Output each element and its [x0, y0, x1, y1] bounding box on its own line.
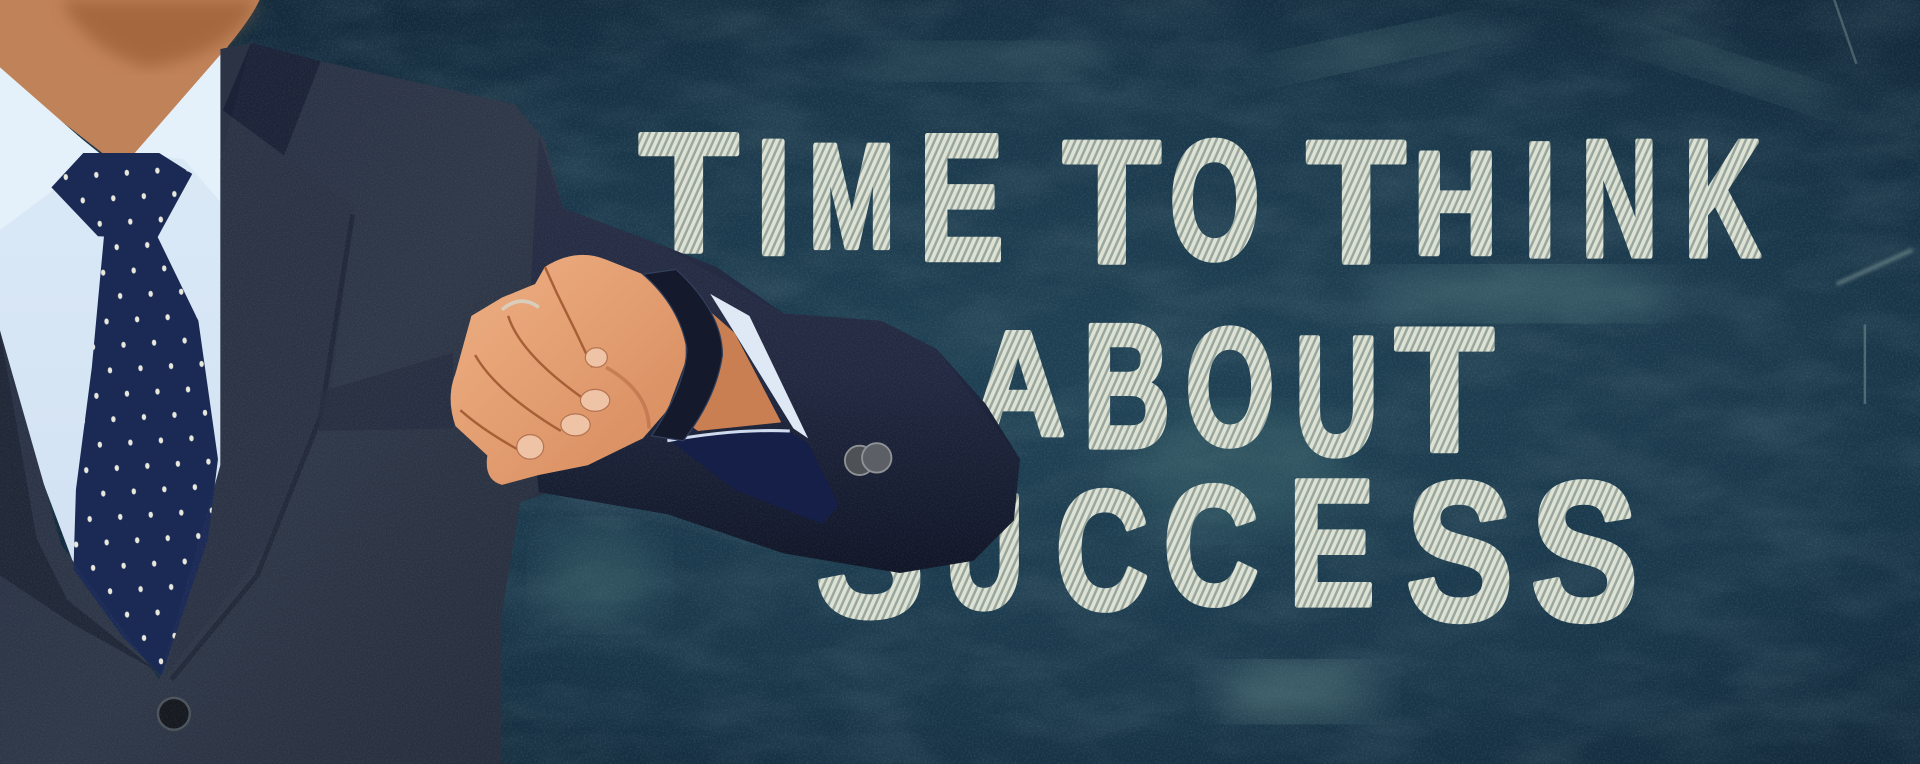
icon: finger nails [517, 348, 610, 459]
chalk heading: time to think about success [639, 98, 1761, 662]
line 3: SUCCESS: C [1056, 456, 1149, 645]
line 1: TIME TO THINK: M [808, 114, 895, 279]
man: jacket button [158, 698, 190, 730]
line 2: ABOUT [971, 288, 1494, 490]
man: chin shadow [61, 0, 257, 67]
line 1: TIME TO THINK [639, 98, 1761, 299]
line 2: ABOUT: U [1294, 301, 1379, 490]
line 3: SUCCESS: S [1406, 442, 1513, 662]
man: shirt collar [0, 49, 225, 230]
line 2: ABOUT: O [1185, 294, 1275, 480]
line 1: TIME TO THINK: T [639, 98, 738, 287]
line 1: TIME TO THINK: H [1413, 121, 1498, 284]
line 3: SUCCESS: U [945, 462, 1024, 642]
man: jacket sleeve [527, 135, 1020, 573]
line 3: SUCCESS: C [1163, 451, 1259, 640]
man: hand [451, 255, 686, 485]
man: shirt cuff [667, 294, 839, 524]
line 1: TIME TO THINK: I [756, 106, 791, 288]
line 3: SUCCESS: S [1531, 442, 1638, 662]
man: wrist [686, 306, 781, 431]
man: shirt [0, 49, 225, 563]
line 2: ABOUT: B [1082, 288, 1171, 485]
line 1: TIME TO THINK: E [918, 98, 1004, 299]
man: jacket lapel [0, 43, 355, 680]
man: cufflink [845, 443, 891, 475]
man: polka dot tie [51, 153, 218, 676]
man: wristwatch band [643, 269, 722, 441]
line 1: TIME TO THINK: O [1169, 105, 1260, 294]
line 3: SUCCESS: S [816, 444, 924, 657]
jacket cloth texture [0, 43, 1020, 764]
line 1: TIME TO THINK: T [1307, 105, 1406, 299]
man: jacket pocket [318, 353, 453, 431]
line 3: SUCCESS [816, 442, 1638, 662]
icon: ring [502, 301, 539, 310]
line 2: ABOUT: T [1395, 292, 1494, 489]
man: neck and chin [0, 0, 260, 159]
line 1: TIME TO THINK: K [1684, 106, 1761, 292]
line 1: TIME TO THINK: I [1523, 109, 1556, 291]
line 1: TIME TO THINK: N [1581, 106, 1658, 292]
man: jacket torso [0, 43, 563, 764]
line 2: ABOUT: A [971, 302, 1065, 467]
line 3: SUCCESS: E [1288, 443, 1375, 644]
line 1: TIME TO THINK: T [1063, 105, 1161, 299]
